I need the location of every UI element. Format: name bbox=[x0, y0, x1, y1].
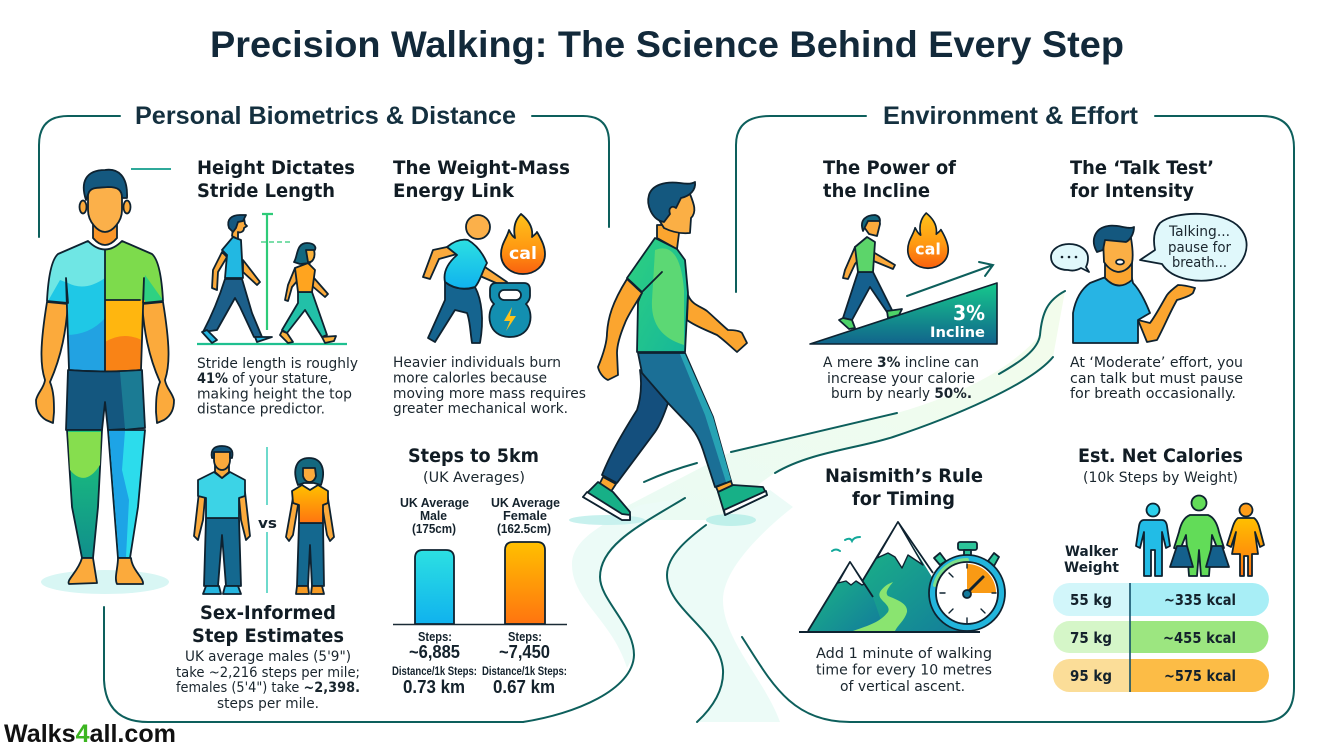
text block: moving more mass requires bbox=[393, 386, 586, 402]
front arm bbox=[598, 279, 642, 380]
panel frame: personal biometrics bbox=[39, 116, 609, 722]
values: male: 0.73 km bbox=[403, 677, 465, 697]
feet bbox=[69, 558, 143, 584]
table row: 75 kg: ~455 kcal bbox=[1163, 629, 1236, 647]
icon: calorie flame bbox=[501, 214, 545, 274]
icon: central walking man bbox=[569, 182, 767, 526]
callout: large speech bubble: Talking... bbox=[1168, 224, 1230, 240]
bar label: female: (162.5cm) bbox=[497, 521, 551, 536]
icon: man and woman walking with height marker bbox=[197, 214, 347, 344]
heading: (UK Averages) bbox=[423, 470, 525, 486]
text block bbox=[197, 356, 358, 418]
icon: three weight figures bbox=[1136, 496, 1264, 576]
section: estimated net calories bbox=[1053, 445, 1269, 692]
text block: increase your calorie bbox=[827, 371, 975, 387]
heading: the Incline bbox=[823, 180, 930, 202]
head bbox=[80, 170, 130, 232]
heading bbox=[408, 445, 539, 486]
heading: Naismith’s Rule bbox=[825, 465, 983, 487]
text block bbox=[393, 355, 586, 417]
text block: burn by nearly 50%. bbox=[831, 386, 972, 402]
rear leg bbox=[602, 370, 668, 483]
path: winding trail bbox=[523, 291, 1065, 722]
right arm bbox=[142, 302, 174, 423]
text block bbox=[1070, 355, 1243, 402]
table row: 75 kg: 75 kg bbox=[1070, 629, 1112, 647]
text block: Add 1 minute of walking bbox=[816, 646, 992, 662]
table row: 55 kg: 55 kg bbox=[1070, 591, 1112, 609]
table row: 55 kg: ~335 kcal bbox=[1164, 591, 1236, 609]
text block: distance predictor. bbox=[197, 402, 325, 418]
bar label: male: Male bbox=[420, 508, 447, 523]
heading: (10k Steps by Weight) bbox=[1083, 470, 1238, 486]
values: female bbox=[482, 629, 567, 697]
section: sex-informed step estimates bbox=[176, 446, 360, 712]
bar label: male: UK Average bbox=[400, 495, 469, 510]
text block: more calorles because bbox=[393, 370, 547, 386]
text block bbox=[816, 646, 992, 695]
heading: Stride Length bbox=[197, 180, 335, 202]
socks bbox=[598, 477, 616, 493]
text block: for breath occasionally. bbox=[1070, 386, 1236, 402]
heading bbox=[192, 602, 344, 647]
left arm bbox=[36, 302, 68, 423]
bar: female bbox=[505, 542, 545, 624]
label: walker weight: Weight bbox=[1064, 560, 1119, 576]
heading bbox=[1070, 157, 1214, 202]
heading bbox=[823, 157, 957, 202]
section: naismith's rule bbox=[799, 465, 1005, 695]
panel frame: environment and effort bbox=[736, 116, 1294, 722]
title: Precision Walking: The Science Behind Every Step bbox=[210, 23, 1124, 65]
heading: The Weight-Mass bbox=[393, 157, 570, 179]
heading bbox=[393, 157, 570, 202]
icon: calorie flame: cal bbox=[509, 244, 537, 264]
heading: The ‘Talk Test’ bbox=[1070, 157, 1214, 179]
callout: large speech bubble: breath... bbox=[1172, 255, 1227, 271]
label: walker weight bbox=[1064, 544, 1119, 576]
icon: incline wedge with walker: 3% bbox=[953, 301, 985, 325]
text block: Stride length is roughly bbox=[197, 356, 358, 372]
heading: Sex-Informed bbox=[200, 602, 336, 624]
heading bbox=[1078, 445, 1243, 486]
shirt quadrants bbox=[48, 242, 162, 371]
icon: calorie flame bbox=[908, 213, 948, 268]
values: male: Distance/1k Steps: bbox=[392, 664, 477, 678]
text block bbox=[823, 355, 979, 402]
shoes bbox=[583, 482, 630, 520]
values: female: 0.67 km bbox=[493, 677, 555, 697]
bar label: female: UK Average bbox=[491, 495, 560, 510]
section: talk test bbox=[1051, 157, 1247, 402]
section: power of the incline bbox=[810, 157, 997, 402]
neck and head bbox=[657, 225, 680, 249]
heading: for Intensity bbox=[1070, 180, 1195, 202]
text block: UK average males (5'9") bbox=[185, 649, 351, 665]
text block: steps per mile. bbox=[217, 696, 319, 712]
values: female: ~7,450 bbox=[499, 642, 550, 662]
bar: male bbox=[415, 550, 454, 624]
bar label: female: Female bbox=[503, 508, 547, 523]
heading: environment and effort: Environment & Effort bbox=[883, 102, 1139, 130]
text block: Heavier individuals burn bbox=[393, 355, 561, 371]
table row: 55 kg bbox=[1053, 583, 1269, 616]
icon: colour-coded body figure bbox=[36, 170, 174, 594]
text block: of vertical ascent. bbox=[840, 679, 965, 695]
text block: 41% of your stature, bbox=[197, 371, 332, 387]
heading bbox=[197, 157, 355, 202]
section: height dictates stride length bbox=[197, 157, 358, 418]
label: walker weight: Walker bbox=[1065, 544, 1119, 560]
text block: time for every 10 metres bbox=[816, 662, 992, 678]
section: weight-mass energy link bbox=[393, 157, 586, 417]
icon: talking man bbox=[1073, 226, 1195, 343]
heading: Est. Net Calories bbox=[1078, 445, 1243, 467]
callout: large speech bubble: pause for bbox=[1168, 240, 1231, 256]
text block: A mere 3% incline can bbox=[823, 355, 979, 371]
front leg bbox=[638, 353, 731, 487]
bar label: male: (175cm) bbox=[412, 521, 456, 536]
icon: man vs woman bbox=[194, 446, 334, 594]
table row: 95 kg bbox=[1053, 659, 1269, 692]
icon: mountains and stopwatch bbox=[799, 522, 1005, 632]
shorts bbox=[66, 370, 145, 430]
heading: Steps to 5km bbox=[408, 445, 539, 467]
left leg bbox=[67, 430, 102, 558]
heading bbox=[825, 465, 983, 510]
shirt bbox=[627, 238, 688, 352]
heading: Step Estimates bbox=[192, 625, 344, 647]
values: female: Steps: bbox=[508, 629, 542, 644]
table row: 75 kg bbox=[1054, 621, 1268, 653]
logo: Walks4all.com: Walks4all.com bbox=[4, 720, 176, 748]
neck bbox=[93, 222, 117, 245]
bar label: male bbox=[400, 495, 469, 536]
heading: Energy Link bbox=[393, 180, 514, 202]
text block: At ‘Moderate’ effort, you bbox=[1070, 355, 1243, 371]
right leg bbox=[108, 430, 145, 558]
icon: heavier figure with kettlebell bbox=[423, 215, 531, 343]
table row: 95 kg: 95 kg bbox=[1070, 667, 1112, 685]
text block: making height the top bbox=[197, 386, 352, 402]
bar label: female bbox=[491, 495, 560, 536]
heading: Height Dictates bbox=[197, 157, 355, 179]
heading: personal biometrics: Personal Biometrics & Distance bbox=[135, 102, 516, 130]
values: male bbox=[392, 629, 477, 697]
text block: females (5'4") take ~2,398. bbox=[176, 680, 360, 696]
icon: incline wedge with walker bbox=[810, 215, 997, 344]
callout: large speech bubble bbox=[1140, 214, 1247, 281]
text block: can talk but must pause bbox=[1070, 371, 1243, 387]
icon: man vs woman: vs bbox=[258, 516, 277, 532]
heading: The Power of bbox=[823, 157, 957, 179]
callout: small speech bubble bbox=[1051, 244, 1089, 272]
heading: for Timing bbox=[852, 488, 955, 510]
icon: incline wedge with walker: Incline bbox=[930, 325, 985, 341]
section: steps to 5km chart bbox=[392, 445, 567, 697]
rear arm bbox=[687, 295, 747, 352]
table row: 95 kg: ~575 kcal bbox=[1164, 667, 1236, 685]
text block: take ~2,216 steps per mile; bbox=[176, 665, 360, 681]
icon: calorie flame: cal bbox=[915, 239, 941, 258]
values: male: ~6,885 bbox=[409, 642, 460, 662]
values: female: Distance/1k Steps: bbox=[482, 664, 567, 678]
values: male: Steps: bbox=[418, 629, 452, 644]
text block bbox=[176, 649, 360, 712]
text block: greater mechanical work. bbox=[393, 401, 568, 417]
